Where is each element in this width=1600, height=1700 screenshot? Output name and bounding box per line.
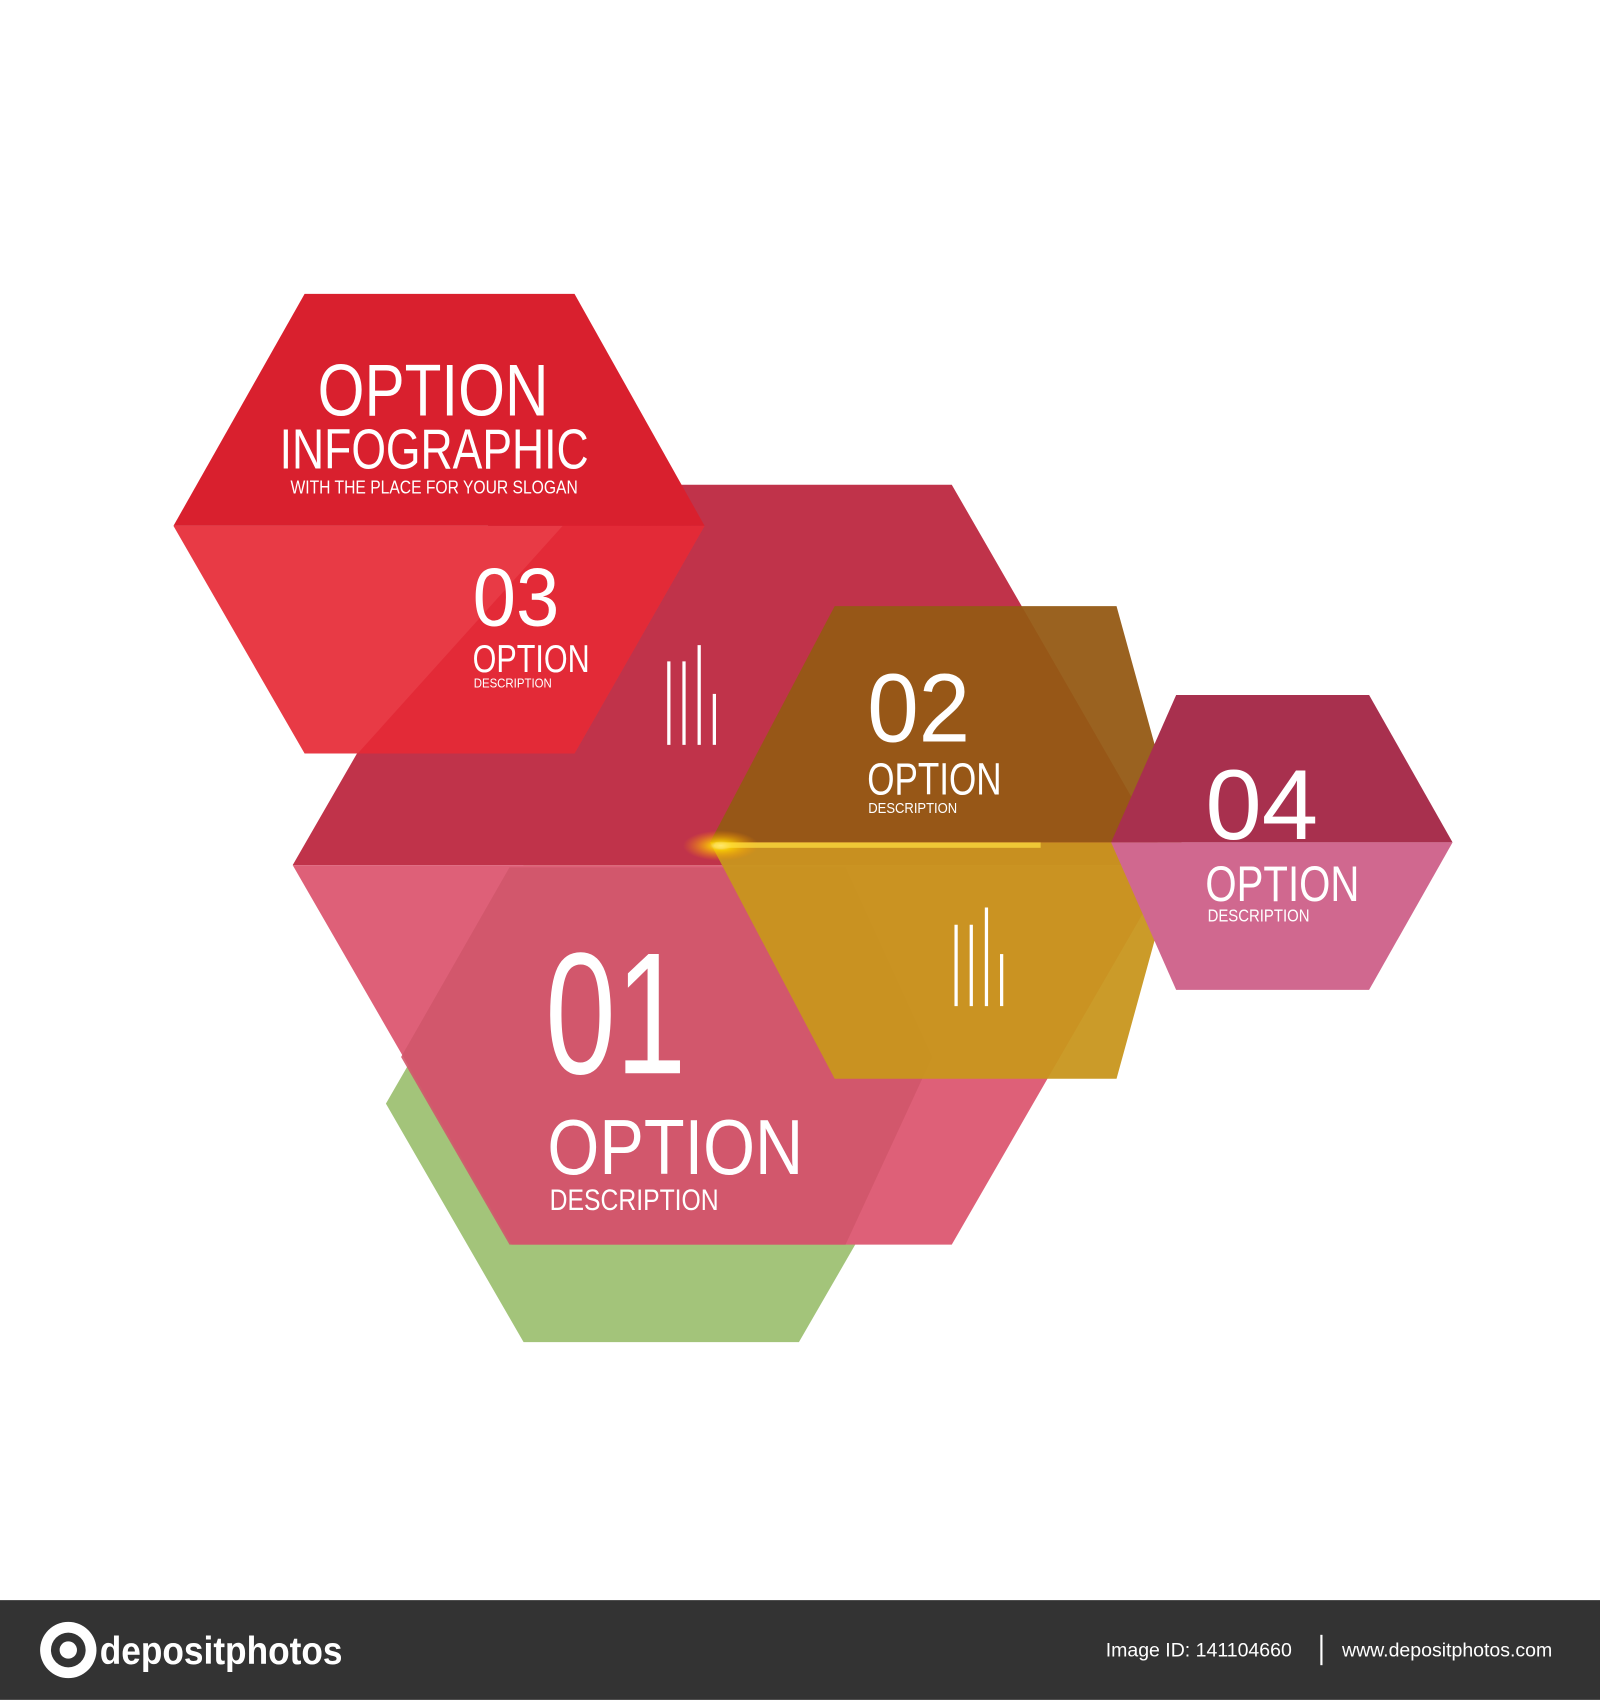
text: option 02: OPTION [867, 754, 1002, 805]
text: 01: 01 [545, 916, 686, 1110]
icon: bars yellow [956, 907, 1002, 1006]
icon: logo [40, 1622, 96, 1678]
text: title infographic: INFOGRAPHIC [280, 417, 589, 480]
text: option 01: OPTION [547, 1103, 803, 1191]
text: 03: 03 [473, 552, 559, 644]
text: brand: depositphotos [100, 1630, 343, 1673]
text: image id: Image ID: 141104660 [1106, 1640, 1292, 1662]
hexagon: 01 option [401, 867, 932, 1245]
icon: bars red [669, 645, 714, 745]
text: description 04: DESCRIPTION [1208, 906, 1309, 926]
text: option 03: OPTION [473, 638, 590, 681]
glow [683, 830, 1041, 861]
text: option 04: OPTION [1205, 856, 1359, 912]
text: description 02: DESCRIPTION [868, 800, 957, 817]
text: description 03: DESCRIPTION [474, 675, 552, 690]
text: description 01: DESCRIPTION [550, 1185, 719, 1217]
text: slogan: WITH THE PLACE FOR YOUR SLOGAN [291, 476, 578, 497]
hexagon: green back [386, 865, 937, 1342]
text: 04: 04 [1205, 750, 1318, 861]
hexagon: 04 option [1111, 695, 1453, 990]
text: 02: 02 [867, 654, 970, 763]
text: url: www.depositphotos.com [1341, 1640, 1552, 1662]
hexagon: title red [173, 294, 705, 754]
text: title option: OPTION [318, 348, 549, 431]
hexagon: 02 option [710, 606, 1182, 1079]
footer bar [0, 1600, 1600, 1700]
hexagon: big red background [293, 485, 1171, 1245]
